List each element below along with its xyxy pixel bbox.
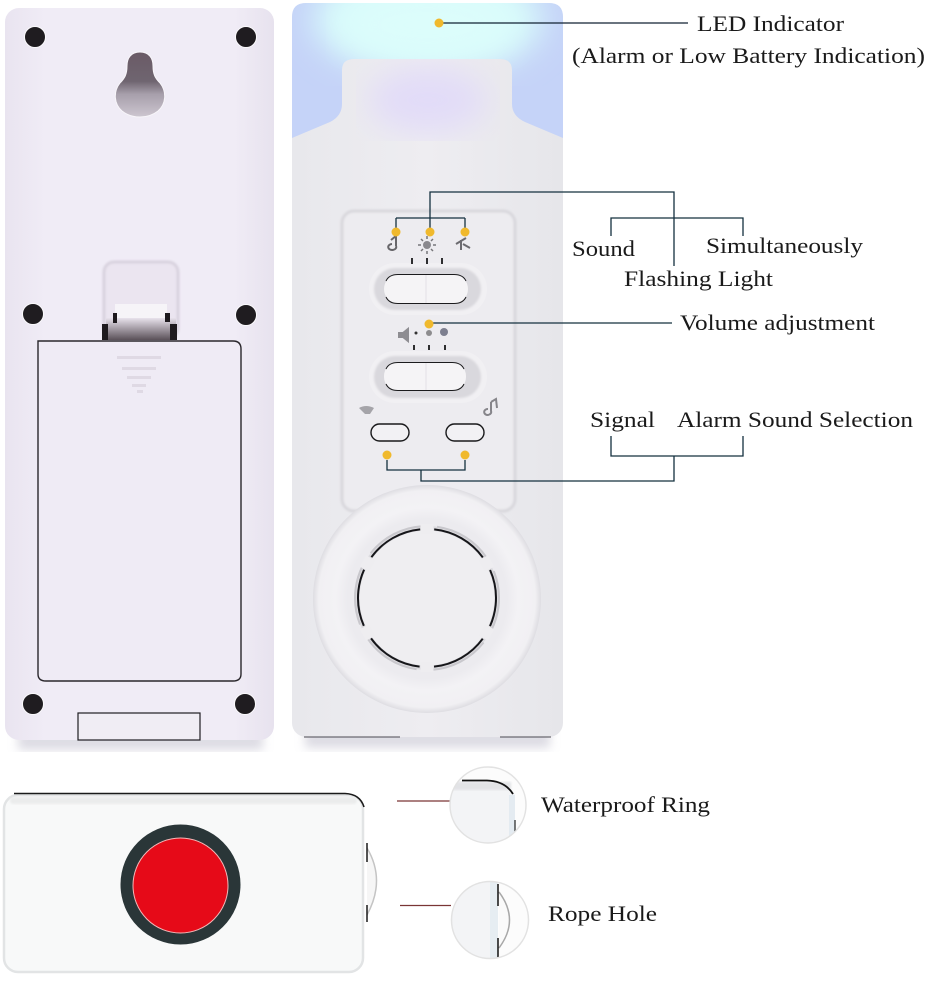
button: alarm sound	[446, 399, 497, 441]
callout: sound, flashing light, simultaneously: Flashing Light	[624, 266, 773, 291]
bottom tab	[78, 713, 200, 740]
icons: volume symbols	[399, 328, 448, 350]
icon: button bezel	[120, 824, 240, 944]
callout: rope hole: Rope Hole	[548, 901, 657, 926]
icon: cover arrow	[117, 356, 161, 393]
slider: mode	[369, 263, 487, 315]
callout: rope hole	[400, 880, 657, 962]
callout: signal and alarm sound selection	[382, 407, 913, 481]
panel: wireless call button	[4, 794, 376, 972]
battery cover	[38, 341, 241, 681]
slider: volume	[369, 351, 487, 403]
callout: sound, flashing light, simultaneously	[392, 192, 863, 291]
callout: waterproof ring: Waterproof Ring	[541, 792, 710, 817]
icon: mounting screw holes	[22, 26, 256, 714]
LED light bar	[292, 0, 563, 143]
panel: device front	[292, 0, 563, 737]
callout: waterproof ring	[397, 767, 710, 850]
callout: LED indicator: LED Indicator	[697, 11, 845, 36]
battery clip recess	[102, 262, 178, 340]
bottom edge line	[304, 736, 551, 738]
callout: sound, flashing light, simultaneously: Sound	[572, 236, 635, 261]
callout: volume adjustment	[424, 310, 875, 335]
face plate glow	[368, 66, 488, 134]
callout: volume adjustment: Volume adjustment	[680, 310, 875, 335]
icon: keyhole hanger	[115, 52, 165, 117]
callout: signal and alarm sound selection: Signal	[590, 407, 655, 432]
shadow under devices	[18, 730, 550, 750]
panel: device back	[5, 8, 274, 740]
callout: LED indicator: (Alarm or Low Battery Indication)	[572, 43, 925, 68]
callout: LED indicator	[434, 11, 925, 68]
icons: mode symbols	[388, 236, 470, 264]
button: signal	[359, 406, 409, 441]
callout: sound, flashing light, simultaneously: Simultaneously	[706, 233, 863, 258]
icon: red button	[133, 838, 228, 933]
speaker	[313, 485, 541, 713]
control recess	[342, 211, 515, 511]
callout: signal and alarm sound selection: Alarm Sound Selection	[677, 407, 913, 432]
